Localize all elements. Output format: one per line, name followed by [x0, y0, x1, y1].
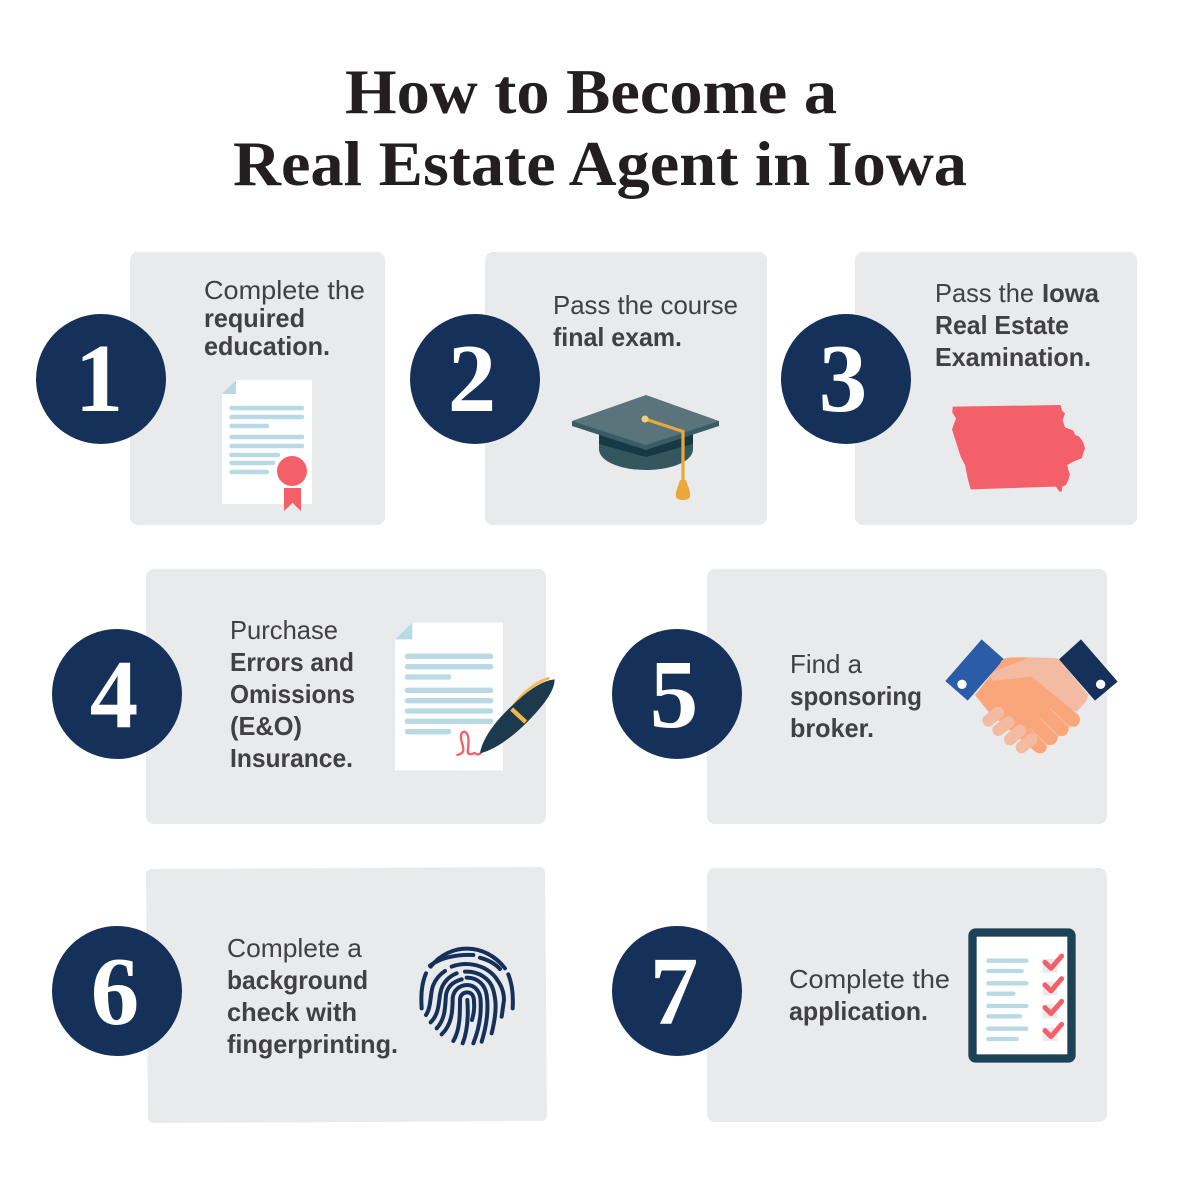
panel: step 4 — [52, 569, 555, 824]
card 5 — [707, 569, 1107, 824]
text: step 1 — [204, 275, 365, 361]
card 6 — [146, 867, 547, 1123]
card 4 — [146, 569, 546, 824]
panel: step 2 — [410, 252, 767, 525]
text: step 5: sponsoring — [790, 681, 922, 711]
icon: signed document with pen — [395, 623, 555, 770]
icon: fingerprint — [421, 949, 513, 1043]
text: step 4 — [230, 615, 355, 773]
text: step 3: Iowa — [1042, 278, 1100, 308]
panel: step 1 — [36, 252, 385, 525]
text: step 3: Real Estate — [935, 310, 1069, 340]
text: step 4: Omissions — [230, 679, 355, 709]
text: step 3: Examination. — [935, 342, 1091, 372]
number badge 7: 7 — [650, 938, 698, 1045]
icon: handshake — [945, 639, 1118, 753]
text: step 1: Complete the — [204, 275, 365, 305]
text: step 6 — [227, 933, 398, 1059]
card 3 — [855, 252, 1137, 525]
panel: step 6 — [52, 867, 547, 1123]
icon: certificate — [222, 380, 312, 511]
panel: step 3 — [781, 252, 1137, 525]
icon: checklist — [968, 928, 1076, 1063]
number badge 6 — [52, 926, 182, 1056]
text: step 3 — [935, 278, 1100, 372]
text: step 6: background — [227, 965, 368, 995]
title: How to Become a — [345, 56, 837, 127]
text: step 2 — [553, 290, 738, 352]
number badge 3 — [781, 314, 911, 444]
text: step 4: Errors and — [230, 647, 354, 677]
text: step 7 — [789, 964, 950, 1026]
text: step 6: fingerprinting. — [227, 1029, 398, 1059]
number badge 4 — [52, 629, 182, 759]
number badge 1 — [36, 314, 166, 444]
panel: step 5 — [612, 569, 1118, 824]
number badge 2 — [410, 314, 540, 444]
text: step 1: education. — [204, 331, 330, 361]
card 2 — [485, 252, 767, 525]
text: step 7: application. — [789, 996, 928, 1026]
text: step 2: final exam. — [553, 322, 682, 352]
number badge 7 — [612, 926, 742, 1056]
number badge 4: 4 — [90, 641, 138, 748]
number badge 5: 5 — [650, 641, 698, 748]
text: step 4: Insurance. — [230, 743, 353, 773]
title: Real Estate Agent in Iowa — [233, 128, 967, 199]
panel: step 7 — [612, 868, 1107, 1122]
number badge 5 — [612, 629, 742, 759]
text: step 4: (E&O) — [230, 711, 302, 741]
card 7 — [707, 868, 1107, 1122]
text: step 2: Pass the course — [553, 290, 738, 320]
text: step 6: check with — [227, 997, 357, 1027]
icon: Iowa state map — [952, 405, 1085, 492]
text: step 3: Pass the — [935, 278, 1034, 308]
text: step 5 — [790, 649, 922, 743]
text: step 5: Find a — [790, 649, 863, 679]
number badge 3: 3 — [819, 325, 867, 432]
text: step 6: Complete a — [227, 933, 363, 963]
text: step 5: broker. — [790, 713, 874, 743]
text: step 7: Complete the — [789, 964, 950, 994]
text: step 1: required — [204, 303, 305, 333]
card 1 — [130, 252, 385, 525]
number badge 6: 6 — [91, 938, 139, 1045]
icon: graduation cap — [572, 395, 719, 500]
number badge 1: 1 — [75, 325, 123, 432]
text: step 4: Purchase — [230, 615, 338, 645]
number badge 2: 2 — [448, 325, 496, 432]
title — [233, 56, 967, 199]
